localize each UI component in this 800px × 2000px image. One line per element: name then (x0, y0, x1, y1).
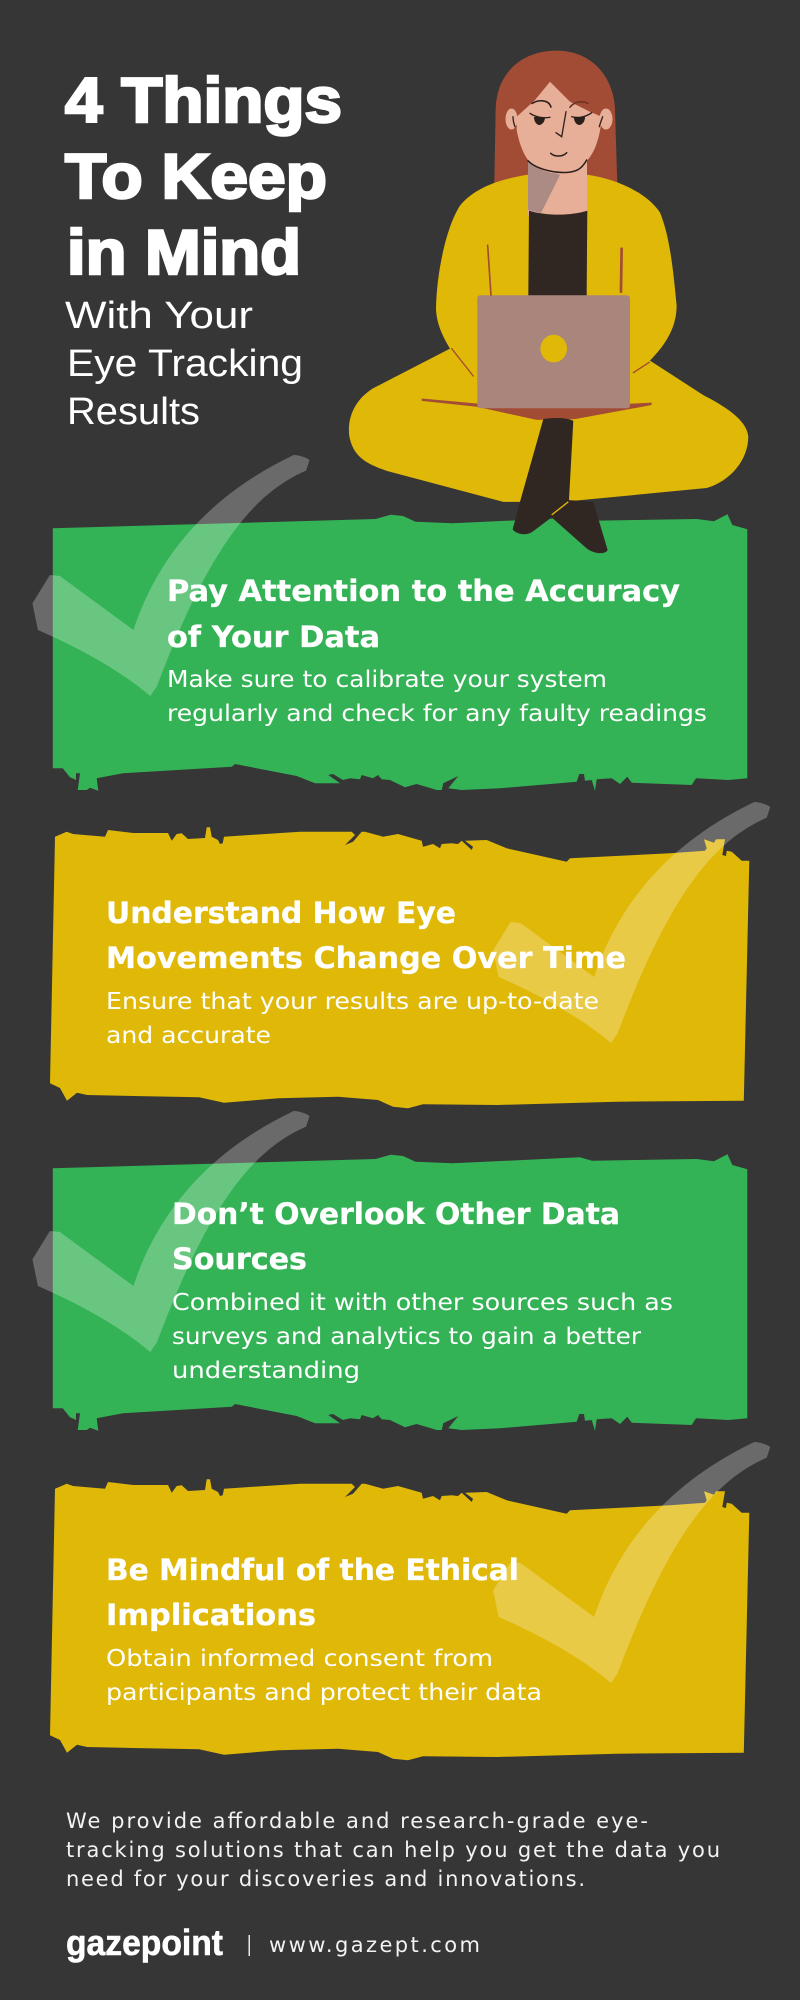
logo: gazepoint: gazepoint (66, 1922, 223, 1963)
body text: and accurate (106, 1023, 271, 1049)
body text: surveys and analytics to gain a better (172, 1324, 642, 1350)
body text (167, 667, 707, 727)
heading: Don’t Overlook Other Data (172, 1197, 620, 1231)
face (517, 82, 602, 173)
title: 4 Things (65, 66, 342, 136)
panel: eye movements over time (50, 802, 770, 1108)
illustration: woman with laptop (349, 51, 748, 553)
suit crease lines (452, 245, 649, 376)
laptop logo (540, 335, 567, 362)
checkmark watermark (493, 802, 770, 1043)
checkmark watermark (32, 455, 310, 696)
subtitle: With Your (65, 295, 253, 337)
ears (506, 108, 612, 130)
footer text: tracking solutions that can help you get the data you (66, 1838, 720, 1862)
body text: Ensure that your results are up-to-date (106, 989, 599, 1015)
footer text (66, 1809, 720, 1891)
panel: accuracy of your data (32, 455, 747, 791)
heading: Understand How Eye (106, 896, 456, 930)
hair (494, 51, 617, 185)
heading (167, 574, 680, 654)
checkmark watermark (32, 1111, 310, 1352)
subtitle (65, 295, 303, 433)
body text: regularly and check for any faulty readings (167, 701, 707, 727)
title: in Mind (67, 218, 301, 288)
heading: Be Mindful of the Ethical (106, 1553, 519, 1587)
panel: other data sources (32, 1111, 747, 1431)
title: To Keep (65, 142, 327, 212)
heading: Implications (106, 1598, 316, 1632)
heading (106, 896, 626, 975)
lap shadow (422, 399, 652, 420)
body text: Combined it with other sources such as (172, 1290, 673, 1316)
yellow torn card (50, 1479, 749, 1760)
heading: Sources (172, 1242, 307, 1276)
eyes (534, 117, 585, 125)
body text: Obtain informed consent from (106, 1646, 493, 1672)
subtitle: Results (67, 391, 200, 433)
heading: of Your Data (167, 620, 380, 654)
website link: www.gazept.com (269, 1933, 480, 1957)
body text: participants and protect their data (106, 1680, 542, 1706)
yellow suit (349, 175, 748, 502)
body text: understanding (172, 1358, 360, 1384)
footer text: need for your discoveries and innovations. (66, 1867, 585, 1891)
body text (106, 989, 599, 1049)
body text: Make sure to calibrate your system (167, 667, 607, 693)
checkmark watermark (493, 1442, 770, 1683)
yellow torn card (50, 827, 749, 1108)
facial features (513, 101, 603, 173)
body text (106, 1646, 542, 1706)
panel: ethical implications (50, 1442, 770, 1760)
legs (513, 418, 608, 553)
body text (172, 1290, 673, 1384)
laptop (477, 295, 630, 408)
heading: Movements Change Over Time (106, 941, 626, 975)
heading (172, 1197, 620, 1276)
neck shadow (528, 161, 560, 213)
heading (106, 1553, 519, 1632)
title (65, 66, 342, 288)
ankle highlight (552, 502, 568, 515)
heading: Pay Attention to the Accuracy (167, 574, 680, 608)
black top (528, 211, 587, 297)
subtitle: Eye Tracking (67, 343, 303, 385)
green torn card (53, 1154, 747, 1431)
green torn card (53, 514, 747, 791)
neck (528, 155, 587, 216)
footer text: We provide affordable and research-grade eye- (66, 1809, 648, 1833)
